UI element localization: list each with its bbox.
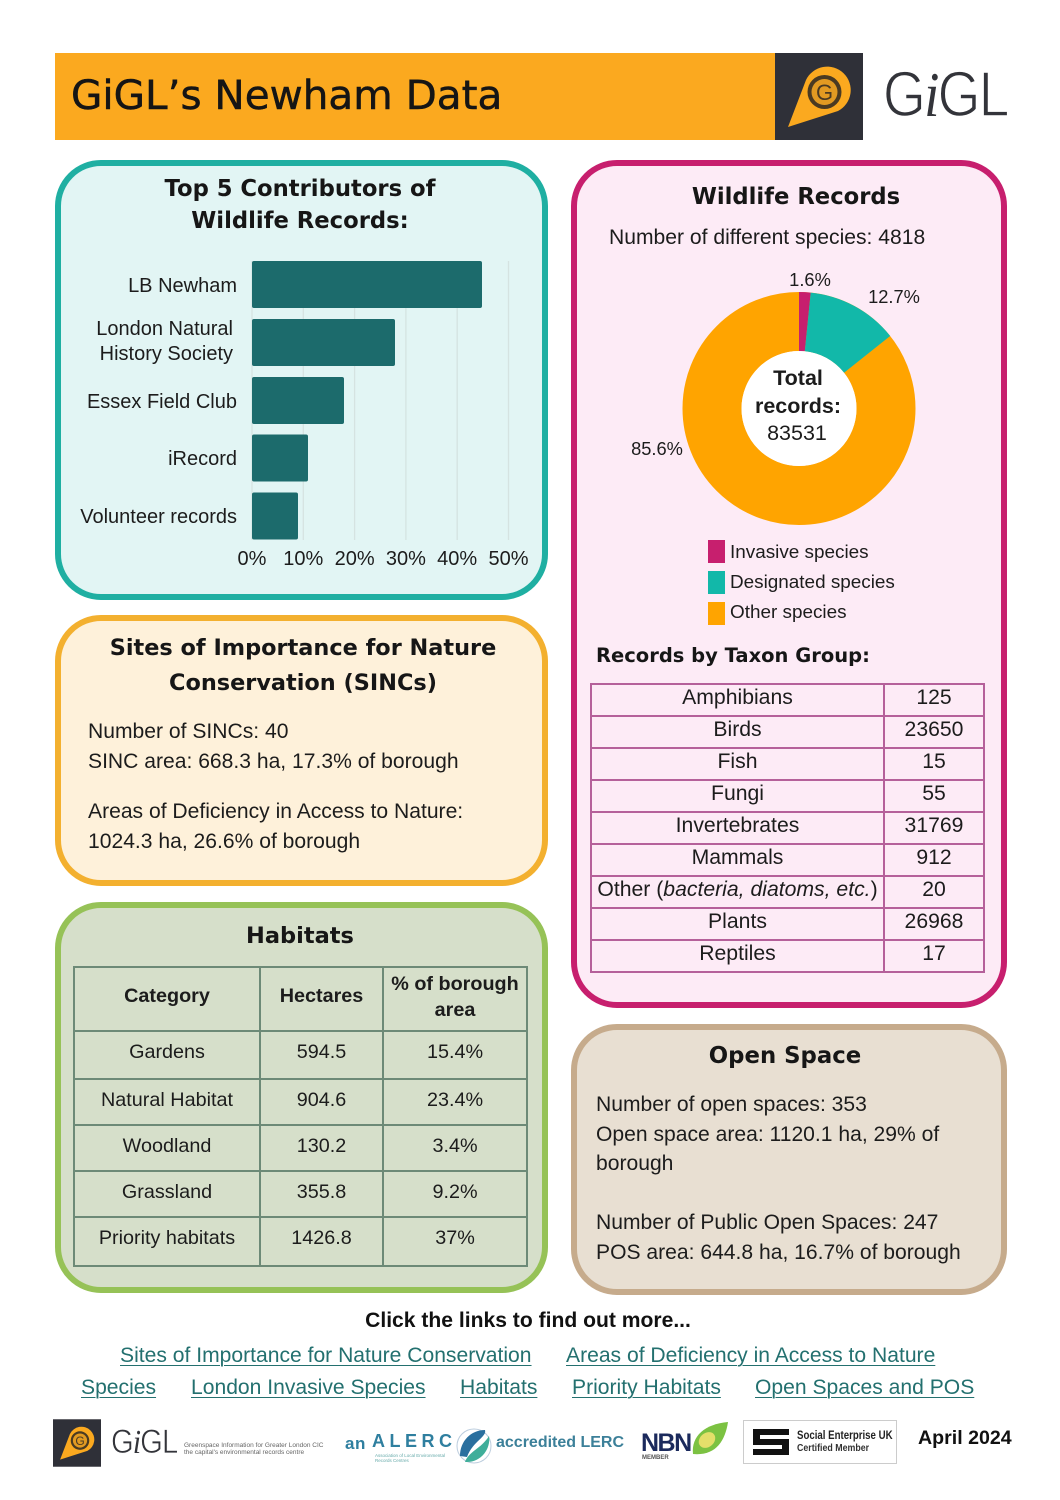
table: habitats: 1426.8 xyxy=(291,1227,352,1249)
badge: Social Enterprise UK: Social Enterprise UK xyxy=(797,1430,893,1442)
logo: NBN member: MEMBER xyxy=(642,1455,669,1461)
table: habitats: Grassland xyxy=(122,1181,212,1203)
bar chart: contributors: 0% xyxy=(238,548,267,570)
table: taxon groups: Fungi xyxy=(711,782,764,804)
table: habitats: 594.5 xyxy=(297,1041,346,1063)
panel: top contributors xyxy=(55,160,548,600)
panel: habitats xyxy=(55,902,548,1293)
logo: ALERC accreditation: Association of Local Environmental xyxy=(375,1453,445,1458)
table: taxon groups: 26968 xyxy=(905,910,963,932)
links row one: Areas of Deficiency in Access to Nature xyxy=(566,1344,935,1367)
text: GiGL strapline: the capital's environmental records centre xyxy=(184,1448,304,1456)
table: taxon groups: Plants xyxy=(708,910,767,932)
logo: ALERC accreditation: ALERC xyxy=(372,1431,456,1451)
table: habitats: % of borough xyxy=(391,973,519,995)
links row two xyxy=(81,1376,974,1399)
heading: SINCs: Sites of Importance for Nature xyxy=(110,635,496,661)
table: taxon groups: Other (bacteria, diatoms, etc.) xyxy=(597,878,878,900)
table: habitats: Woodland xyxy=(123,1135,211,1157)
table: habitats: 15.4% xyxy=(427,1041,483,1063)
heading: top contributors: Top 5 Contributors of xyxy=(165,176,435,202)
heading: wildlife records: Wildlife Records xyxy=(692,184,900,210)
icon: ALERC swoosh xyxy=(456,1428,492,1464)
table: habitats: Hectares xyxy=(280,985,363,1007)
table: habitats: Category xyxy=(124,985,210,1007)
bar chart: contributors: iRecord xyxy=(168,448,237,470)
links row two: Species xyxy=(81,1376,156,1399)
table: habitats: 23.4% xyxy=(427,1089,483,1111)
icon: NBN leaf xyxy=(692,1422,728,1454)
text: SINC figures: SINC area: 668.3 ha, 17.3% of borough xyxy=(88,750,459,772)
table: habitats: 355.8 xyxy=(297,1181,346,1203)
donut chart: total records: 83531 xyxy=(767,421,827,445)
links row two: Habitats xyxy=(460,1376,537,1399)
table: habitats: 9.2% xyxy=(432,1181,478,1203)
title: GiGL’s Newham Data xyxy=(71,71,502,119)
links row two: Priority Habitats xyxy=(572,1376,721,1399)
icon: footer GiGL pin logo xyxy=(53,1419,101,1467)
bar chart: contributors: Volunteer records xyxy=(80,506,237,528)
text: deficiency figures: Areas of Deficiency in Access to Nature: xyxy=(88,800,463,823)
table: habitats: 3.4% xyxy=(432,1135,478,1157)
bar chart: contributors xyxy=(80,261,529,570)
table: taxon groups: 23650 xyxy=(905,718,963,740)
logo: ALERC accreditation: Records Centres xyxy=(375,1458,409,1463)
icon: footer GiGL pin logo: G xyxy=(75,1434,85,1448)
icon: Social Enterprise S mark xyxy=(753,1429,789,1455)
table: habitats: 904.6 xyxy=(297,1089,346,1111)
donut chart: total records: 12.7% xyxy=(868,286,920,307)
legend: record types: Other species xyxy=(730,602,847,623)
logo: NBN member: NBN xyxy=(641,1429,691,1457)
legend: record types xyxy=(708,540,895,625)
logo: GiGL wordmark: GiGL xyxy=(883,58,1008,130)
text: deficiency figures: 1024.3 ha, 26.6% of borough xyxy=(88,830,360,853)
text: open space figures: Number of open spaces: 353 xyxy=(596,1093,867,1116)
table: taxon groups: 17 xyxy=(922,942,946,964)
bar chart: contributors: 50% xyxy=(488,548,529,570)
panel: SINCs xyxy=(55,615,548,886)
logo: ALERC accreditation: accredited LERC xyxy=(496,1434,624,1451)
table: taxon groups: Reptiles xyxy=(699,942,776,964)
links row one xyxy=(120,1344,936,1367)
text: GiGL strapline xyxy=(184,1442,324,1456)
bar chart: contributors: 40% xyxy=(437,548,477,570)
icon: GiGL map pin logo: G xyxy=(816,80,833,105)
text: open space figures: Open space area: 1120.1 ha, 29% of xyxy=(596,1122,939,1146)
table: habitats: Natural Habitat xyxy=(101,1089,233,1111)
heading: habitats: Habitats xyxy=(246,923,354,949)
table: taxon groups: 20 xyxy=(922,878,946,900)
logo: NBN member xyxy=(641,1422,728,1461)
table: taxon groups: 15 xyxy=(922,750,946,772)
logo: ALERC accreditation xyxy=(345,1428,624,1464)
text: public open space figures: Number of Public Open Spaces: 247 xyxy=(596,1211,938,1234)
text: public open space figures xyxy=(596,1211,961,1264)
table: taxon groups: Birds xyxy=(713,718,762,740)
table: taxon groups: 912 xyxy=(916,846,952,868)
donut chart: total records: records: xyxy=(755,394,841,418)
table: taxon groups: 31769 xyxy=(905,814,963,836)
links row two: Open Spaces and POS xyxy=(755,1376,974,1399)
logo: ALERC accreditation: an xyxy=(345,1434,366,1453)
badge: Social Enterprise UK xyxy=(743,1420,897,1464)
text: GiGL strapline: Greenspace Information for Greater London CIC xyxy=(184,1442,323,1449)
header banner xyxy=(55,53,863,140)
heading: SINCs xyxy=(110,635,496,696)
heading: open space: Open Space xyxy=(709,1043,861,1069)
donut chart: total records: Total xyxy=(773,366,823,390)
text: SINC figures xyxy=(88,720,459,772)
heading: records by taxon group: Records by Taxon Group: xyxy=(596,644,870,667)
heading: top contributors: Wildlife Records: xyxy=(191,208,409,234)
text: number of species: Number of different species: 4818 xyxy=(609,226,925,249)
table: taxon groups xyxy=(590,683,985,973)
table: habitats xyxy=(73,966,528,1267)
table: taxon groups: 55 xyxy=(922,782,946,804)
icon: GiGL map pin logo xyxy=(775,53,863,140)
table: taxon groups: 125 xyxy=(916,686,952,708)
table: habitats: Priority habitats xyxy=(99,1227,235,1249)
text: SINC figures: Number of SINCs: 40 xyxy=(88,720,288,743)
legend: record types: Invasive species xyxy=(730,542,869,563)
table: habitats: Gardens xyxy=(129,1041,205,1063)
table: taxon groups: Mammals xyxy=(692,846,783,868)
table: taxon groups: Fish xyxy=(717,750,758,772)
donut chart: total records: 1.6% xyxy=(789,269,831,290)
bar chart: contributors: History Society xyxy=(100,343,233,365)
badge: Social Enterprise UK: Certified Member xyxy=(797,1442,869,1454)
bar chart: contributors: Essex Field Club xyxy=(87,391,237,413)
text: deficiency figures xyxy=(88,800,463,853)
bar chart: contributors: 30% xyxy=(386,548,426,570)
table: taxon groups: Amphibians xyxy=(682,686,793,708)
text: public open space figures: POS area: 644.8 ha, 16.7% of borough xyxy=(596,1240,961,1264)
heading: top contributors xyxy=(164,176,436,234)
heading: SINCs: Conservation (SINCs) xyxy=(169,670,437,696)
text: links heading: Click the links to find out more... xyxy=(365,1309,691,1332)
legend: record types: Designated species xyxy=(730,572,895,593)
donut chart: total records: 85.6% xyxy=(631,438,683,459)
links row two: London Invasive Species xyxy=(191,1376,426,1399)
table: habitats: 130.2 xyxy=(297,1135,346,1157)
bar chart: contributors: 20% xyxy=(335,548,375,570)
text: date: April 2024 xyxy=(918,1427,1012,1449)
text: open space figures: borough xyxy=(596,1152,673,1175)
text: open space figures xyxy=(596,1093,940,1175)
logo: footer GiGL wordmark: GiGL xyxy=(111,1423,177,1461)
bar chart: contributors: 10% xyxy=(283,548,324,570)
table: taxon groups: Invertebrates xyxy=(676,814,799,836)
bar chart: contributors: London Natural xyxy=(96,318,233,340)
bar chart: contributors: LB Newham xyxy=(128,275,237,297)
donut chart: total records xyxy=(631,269,920,525)
table: habitats: 37% xyxy=(435,1227,475,1249)
panel: open space xyxy=(571,1024,1007,1295)
links row one: Sites of Importance for Nature Conservation xyxy=(120,1344,532,1367)
table: habitats: area xyxy=(435,999,475,1021)
panel: wildlife records xyxy=(571,160,1007,1008)
